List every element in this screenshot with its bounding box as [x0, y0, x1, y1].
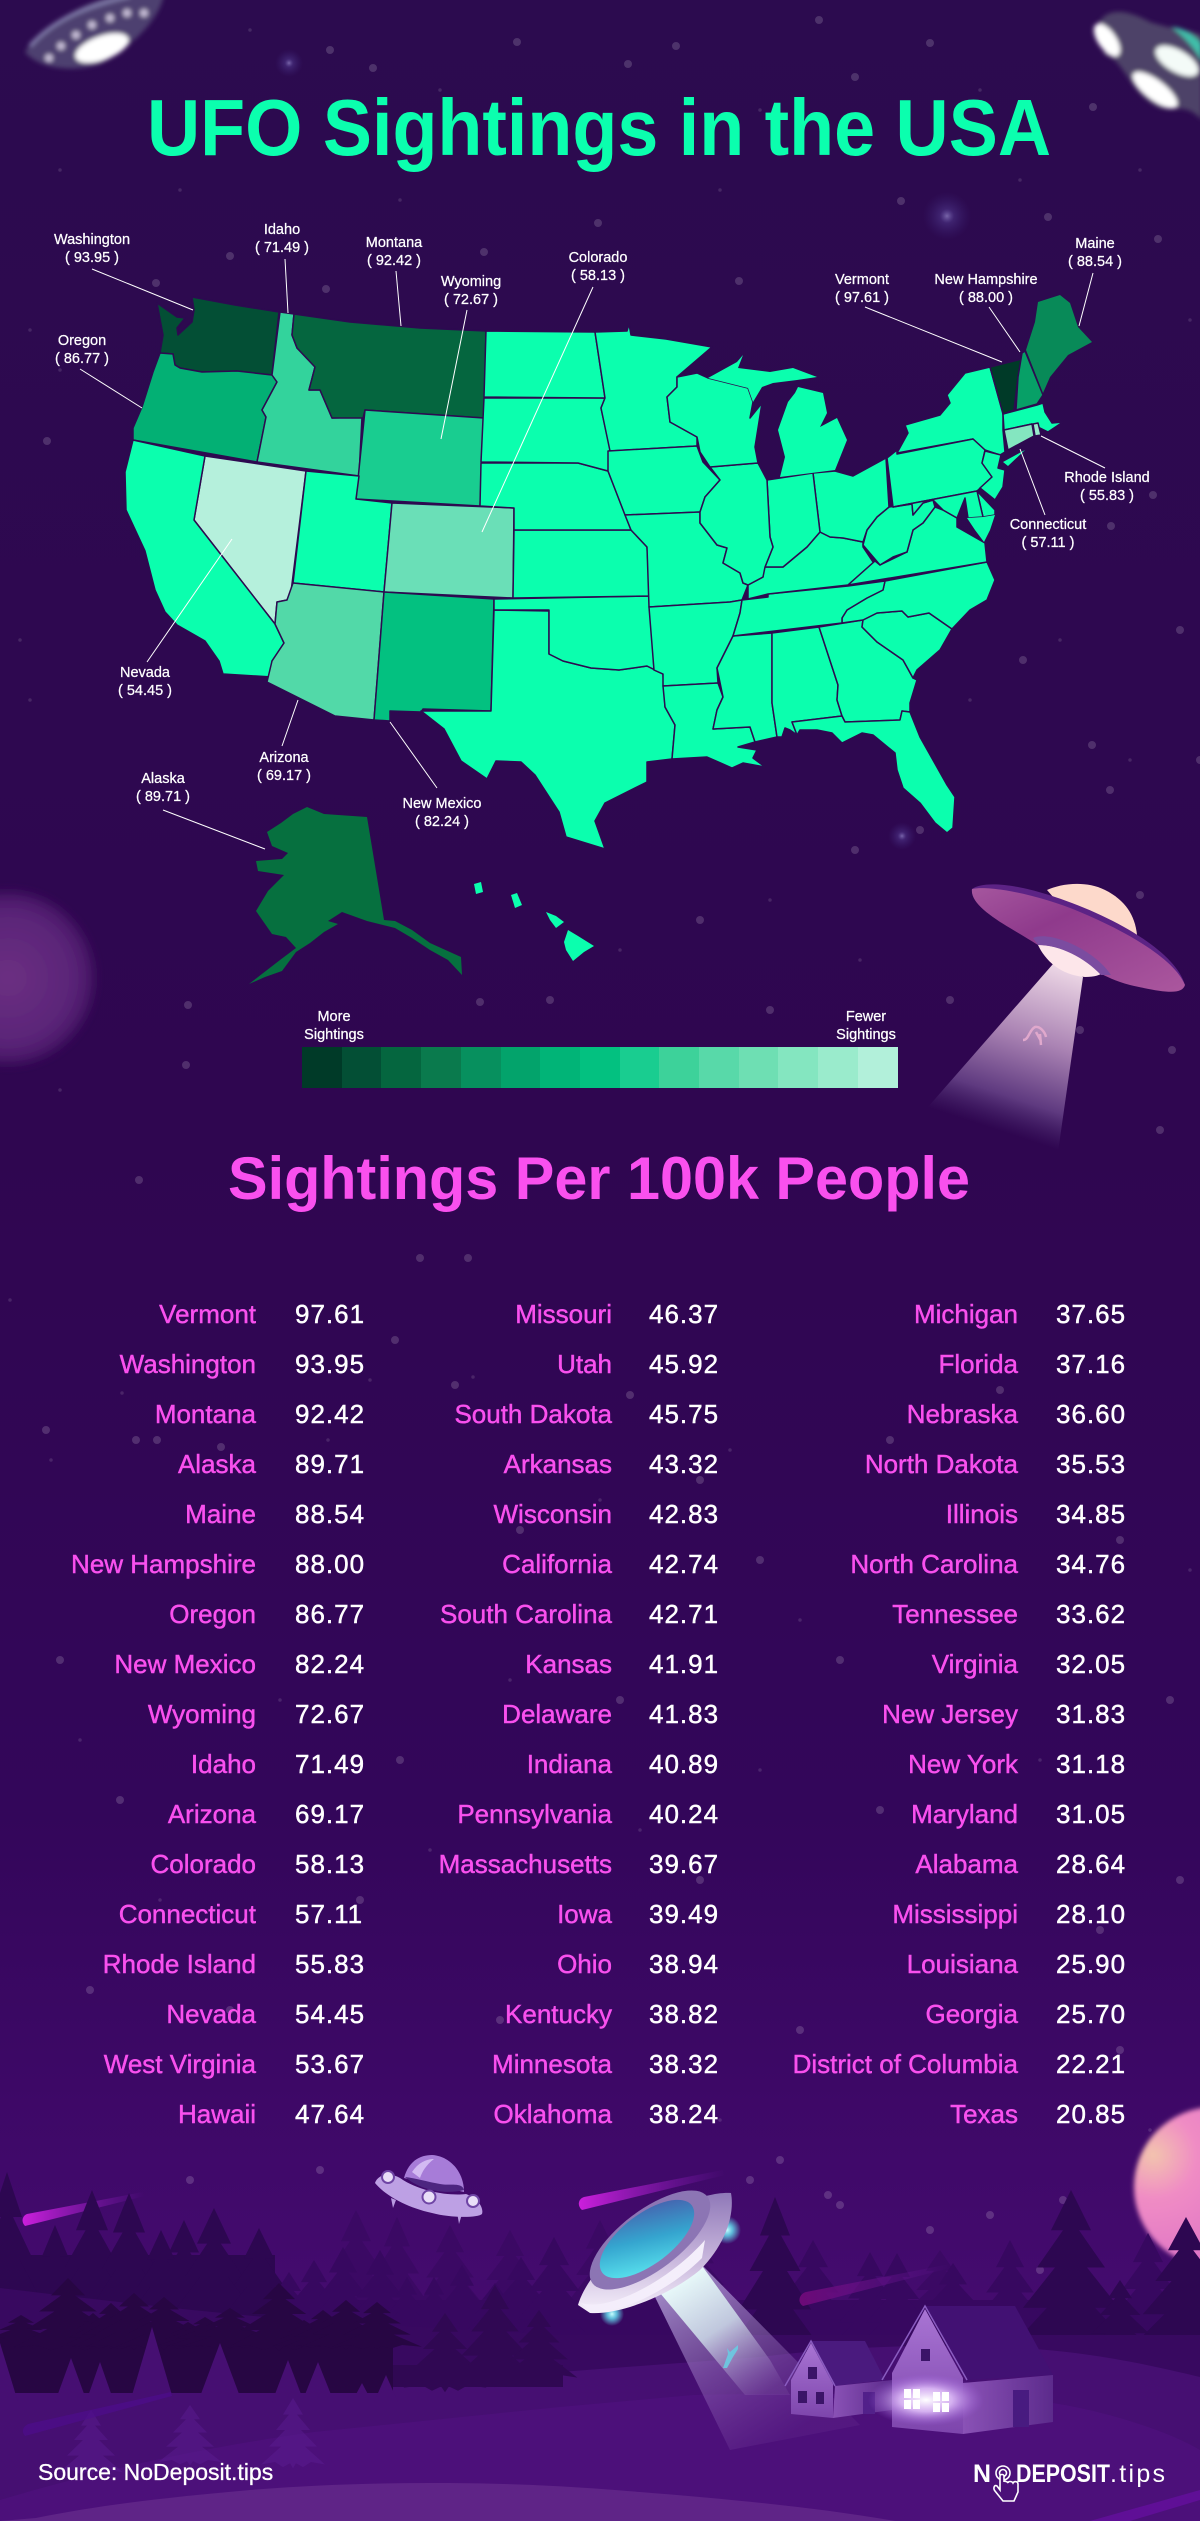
table column 3: 31.83 — [1056, 1699, 1126, 1729]
table column 2: South Dakota — [454, 1399, 613, 1429]
table column 2: Iowa — [557, 1899, 613, 1929]
table column 2: 45.75 — [649, 1399, 719, 1429]
lower dark treeline — [0, 2278, 422, 2393]
table column 1: West Virginia — [104, 2049, 257, 2079]
state: Oklahoma — [494, 596, 663, 674]
tractor beam — [928, 964, 1083, 1152]
state: Iowa — [608, 446, 720, 515]
label: Arizona: Arizona — [259, 750, 309, 766]
table column 1: 82.24 — [295, 1649, 365, 1679]
ufo: silver saucer — [574, 2173, 741, 2326]
table column 2: 41.83 — [649, 1699, 719, 1729]
label: Wyoming: ( 72.67 ) — [444, 292, 498, 308]
table column 2: Arkansas — [504, 1449, 612, 1479]
state: Indiana — [765, 473, 820, 567]
label: Maine: Maine — [1075, 236, 1115, 252]
table column 3: 25.90 — [1056, 1949, 1126, 1979]
label: Vermont: Vermont — [835, 272, 889, 288]
label: Nevada: ( 54.45 ) — [118, 683, 172, 699]
table column 1: Rhode Island — [103, 1949, 256, 1979]
state: Georgia — [819, 620, 917, 722]
state: Kansas — [513, 530, 650, 598]
table column 3: 31.18 — [1056, 1749, 1126, 1779]
table column 3: Georgia — [926, 1999, 1019, 2029]
state: Arkansas — [649, 600, 742, 686]
state: Minnesota — [595, 324, 712, 451]
table column 1: 88.00 — [295, 1549, 365, 1579]
label: Oregon: Oregon — [58, 333, 106, 349]
table column 2: 39.49 — [649, 1899, 719, 1929]
cyan dome — [587, 2185, 707, 2293]
table column 3: 22.21 — [1056, 2049, 1126, 2079]
bright comet behind trees — [23, 2192, 145, 2226]
ufo: small purple — [375, 2155, 482, 2224]
state: Ohio — [813, 458, 889, 542]
logo: NoDeposit.tips: DEPOSIT — [1016, 2460, 1110, 2488]
table column 1: 86.77 — [295, 1599, 365, 1629]
state: Kentucky — [748, 532, 875, 599]
state: California — [125, 440, 284, 677]
table column 1: 93.95 — [295, 1349, 365, 1379]
table column 3: 25.70 — [1056, 1999, 1126, 2029]
table column 1: 53.67 — [295, 2049, 365, 2079]
label: Alaska: ( 89.71 ) — [136, 789, 190, 805]
table column 3: 28.64 — [1056, 1849, 1126, 1879]
table column 3: North Dakota — [865, 1449, 1019, 1479]
table column 3: 35.53 — [1056, 1449, 1126, 1479]
state: North Carolina — [842, 562, 995, 629]
table column 2: 40.89 — [649, 1749, 719, 1779]
label: Vermont: ( 97.61 ) — [835, 290, 889, 306]
label: Wyoming: Wyoming — [441, 274, 501, 290]
table column 3 — [793, 1299, 1126, 2129]
state: Washington — [157, 297, 279, 375]
state: Maryland — [893, 491, 983, 518]
state: New Hampshire — [1016, 351, 1043, 410]
state: Pennsylvania — [887, 439, 992, 507]
state: Utah — [293, 471, 392, 592]
label: Maine: ( 88.54 ) — [1068, 254, 1122, 270]
state: Illinois — [700, 463, 773, 585]
label: Rhode Island: ( 55.83 ) — [1080, 488, 1134, 504]
dark ground band — [0, 2288, 1200, 2400]
table column 3: 37.16 — [1056, 1349, 1126, 1379]
table column 2: 46.37 — [649, 1299, 719, 1329]
saucer body — [972, 888, 1185, 992]
state: Maine — [1026, 295, 1092, 393]
icon: pointing hand — [994, 2466, 1018, 2501]
table column 3: Louisiana — [907, 1949, 1019, 1979]
table column 2: 38.32 — [649, 2049, 719, 2079]
legend label: fewer sightings: Sightings — [836, 1027, 896, 1043]
table column 1: Colorado — [150, 1849, 256, 1879]
state: Florida — [792, 711, 955, 833]
table column 1: Idaho — [191, 1749, 256, 1779]
glow spots — [275, 49, 971, 850]
table column 2: 42.71 — [649, 1599, 719, 1629]
table column 1: Wyoming — [148, 1699, 256, 1729]
state: Alabama — [772, 627, 842, 737]
upper dome — [1047, 884, 1137, 935]
state: New Jersey — [980, 451, 1005, 500]
table column 3: 34.76 — [1056, 1549, 1126, 1579]
table column 1: 72.67 — [295, 1699, 365, 1729]
source: Source: NoDeposit.tips — [38, 2459, 273, 2485]
logo: NoDeposit.tips: N — [973, 2460, 991, 2488]
table column 2: 43.32 — [649, 1449, 719, 1479]
big house — [868, 2306, 1053, 2434]
state: Delmarva peninsula — [967, 515, 995, 542]
table column 1: 97.61 — [295, 1299, 365, 1329]
state: West Virginia — [863, 500, 935, 565]
state: Connecticut — [1004, 424, 1034, 450]
gaps between foreground trees — [0, 2327, 398, 2402]
table column 1: 54.45 — [295, 1999, 365, 2029]
state: New York — [897, 367, 1005, 455]
dark upper left forest — [0, 2172, 307, 2362]
state: Long Island — [1003, 450, 1025, 466]
state: South Dakota — [481, 398, 610, 471]
state: Michigan — [708, 355, 847, 477]
table column 2: 38.24 — [649, 2099, 719, 2129]
table column 1: New Mexico — [114, 1649, 256, 1679]
state: Massachusetts — [1003, 403, 1063, 432]
legend label: more sightings: More — [317, 1009, 351, 1025]
label: Colorado: ( 58.13 ) — [571, 268, 625, 284]
table column 1 — [71, 1299, 365, 2129]
table column 3: Texas — [950, 2099, 1018, 2129]
label: New Mexico: New Mexico — [403, 796, 481, 812]
far pale treeline — [308, 2210, 985, 2342]
planet: left purple — [0, 892, 94, 1064]
state: Vermont — [990, 359, 1022, 414]
label: Montana: ( 92.42 ) — [367, 253, 421, 269]
logo: NoDeposit.tips: .tips — [1110, 2460, 1165, 2488]
state: Missouri — [625, 512, 748, 607]
table column 3: 36.60 — [1056, 1399, 1126, 1429]
table column 2: Wisconsin — [494, 1499, 612, 1529]
logo: NoDeposit.tips — [973, 2460, 1165, 2501]
table column 2: California — [502, 1549, 613, 1579]
table column 1: Washington — [120, 1349, 256, 1379]
state: Alaska — [249, 807, 462, 984]
state: North Dakota — [484, 331, 605, 398]
label: New Hampshire: New Hampshire — [934, 272, 1038, 288]
state: Mississippi — [713, 633, 777, 742]
table column 2: Utah — [557, 1349, 612, 1379]
state: New Mexico — [374, 592, 494, 721]
houses — [785, 2306, 1053, 2434]
table column 1: Arizona — [168, 1799, 257, 1829]
front hill — [0, 2483, 895, 2521]
state: South Carolina — [862, 611, 952, 678]
label: Connecticut: Connecticut — [1010, 517, 1086, 533]
table column 3: Nebraska — [907, 1399, 1019, 1429]
table column 2 — [439, 1299, 719, 2129]
ufo: purple saucer with beam — [928, 884, 1185, 1152]
state: Wyoming — [356, 410, 484, 506]
label: Washington: Washington — [54, 232, 130, 248]
table column 3: 28.10 — [1056, 1899, 1126, 1929]
ufo: top right blurred — [1089, 12, 1200, 120]
pale foreground trees — [59, 2398, 325, 2476]
small house — [785, 2341, 892, 2418]
state: Colorado — [384, 503, 514, 598]
table column 2: 38.82 — [649, 1999, 719, 2029]
comets — [23, 2170, 1200, 2521]
subtitle: Sightings Per 100k People — [228, 1145, 970, 1212]
table column 2: South Carolina — [440, 1599, 613, 1629]
leader lines — [80, 259, 1105, 849]
table column 2: Delaware — [502, 1699, 612, 1729]
table column 3: Michigan — [914, 1299, 1018, 1329]
state: Nevada — [194, 456, 306, 624]
label: Washington: ( 93.95 ) — [65, 250, 119, 266]
planet: right pink — [1134, 2107, 1200, 2267]
lower second treeline — [393, 2285, 577, 2392]
table column 1: 57.11 — [295, 1899, 363, 1929]
table column 3: Virginia — [932, 1649, 1019, 1679]
table column 2: Pennsylvania — [457, 1799, 613, 1829]
table column 3: Florida — [939, 1349, 1019, 1379]
table column 1: Nevada — [166, 1999, 257, 2029]
table column 3: Mississippi — [892, 1899, 1018, 1929]
lower window ring — [1033, 936, 1111, 975]
label: Nevada: Nevada — [120, 665, 170, 681]
table column 2: 39.67 — [649, 1849, 719, 1879]
table column 1: Maine — [185, 1499, 256, 1529]
table column 3: North Carolina — [850, 1549, 1019, 1579]
state: Idaho — [257, 312, 362, 476]
table column 2: Kansas — [525, 1649, 612, 1679]
label: Idaho: ( 71.49 ) — [255, 240, 309, 256]
table column 1: 89.71 — [295, 1449, 365, 1479]
table column 2: 45.92 — [649, 1349, 719, 1379]
table column 3: Maryland — [911, 1799, 1018, 1829]
state: Louisiana — [663, 683, 765, 768]
table column 2: Kentucky — [505, 1999, 612, 2029]
table column 2: Oklahoma — [494, 2099, 613, 2129]
table column 1: New Hampshire — [71, 1549, 256, 1579]
mid forest — [251, 2233, 1200, 2360]
legend — [302, 1009, 898, 1088]
label: Alaska: Alaska — [141, 771, 185, 787]
table column 1: 92.42 — [295, 1399, 365, 1429]
table column 1: Oregon — [169, 1599, 256, 1629]
table column 2: Indiana — [527, 1749, 613, 1779]
table column 1: 55.83 — [295, 1949, 365, 1979]
label: Idaho: Idaho — [264, 222, 300, 238]
table column 1: Montana — [155, 1399, 257, 1429]
abductee — [723, 2345, 738, 2368]
ufo: top left blurred — [25, 0, 164, 69]
label: Arizona: ( 69.17 ) — [257, 768, 311, 784]
label: New Mexico: ( 82.24 ) — [415, 814, 469, 830]
table column 1: 71.49 — [295, 1749, 365, 1779]
table column 2: Massachusetts — [439, 1849, 612, 1879]
table column 1: 47.64 — [295, 2099, 365, 2129]
middle hill — [0, 2394, 1200, 2521]
table column 2: Ohio — [557, 1949, 612, 1979]
table column 2: 40.24 — [649, 1799, 719, 1829]
tall dark trees on the right — [727, 2190, 1200, 2360]
label: New Hampshire: ( 88.00 ) — [959, 290, 1013, 306]
table column 3: 33.62 — [1056, 1599, 1126, 1629]
abductee silhouette — [1023, 1027, 1046, 1045]
ufo light beam — [655, 2263, 860, 2450]
label: Montana: Montana — [366, 235, 422, 251]
table column 3: 20.85 — [1056, 2099, 1126, 2129]
label: Oregon: ( 86.77 ) — [55, 351, 109, 367]
table column 2: Minnesota — [492, 2049, 613, 2079]
table column 2: Missouri — [515, 1299, 612, 1329]
title: UFO Sightings in the USA — [147, 83, 1051, 172]
table column 3: 32.05 — [1056, 1649, 1126, 1679]
table column 1: Vermont — [159, 1299, 257, 1329]
table column 1: Connecticut — [119, 1899, 257, 1929]
table column 1: Alaska — [178, 1449, 257, 1479]
table column 2: 42.74 — [649, 1549, 719, 1579]
state: Arizona — [267, 583, 384, 720]
lit windows — [868, 2374, 984, 2426]
table column 3: Alabama — [915, 1849, 1019, 1879]
map of the USA — [125, 295, 1092, 984]
state: Delaware — [977, 491, 995, 517]
state: Hawaii — [474, 882, 594, 961]
table column 1: Hawaii — [178, 2099, 256, 2129]
table column 3: New Jersey — [882, 1699, 1018, 1729]
table column 3: 31.05 — [1056, 1799, 1126, 1829]
label: Rhode Island: Rhode Island — [1064, 470, 1150, 486]
night landscape — [0, 2172, 1200, 2521]
table column 3: New York — [908, 1749, 1019, 1779]
state: Rhode Island — [1033, 423, 1041, 436]
table column 3: Illinois — [946, 1499, 1018, 1529]
state: Oregon — [133, 353, 277, 462]
state: Virginia — [848, 507, 987, 585]
table column 3: District of Columbia — [793, 2049, 1019, 2079]
map labels — [54, 222, 1150, 830]
lower dome — [1038, 945, 1102, 977]
table column 1: 58.13 — [295, 1849, 365, 1879]
table column 2: 42.83 — [649, 1499, 719, 1529]
state: Montana — [292, 314, 486, 418]
state: Nebraska — [480, 463, 631, 530]
legend colour scale — [302, 1047, 898, 1088]
table column 2: 41.91 — [649, 1649, 719, 1679]
state: Tennessee — [733, 581, 885, 636]
label: Colorado: Colorado — [569, 250, 627, 266]
table column 3: 34.85 — [1056, 1499, 1126, 1529]
table column 1: 69.17 — [295, 1799, 365, 1829]
label: Connecticut: ( 57.11 ) — [1022, 535, 1074, 551]
hill behind houses — [0, 2346, 1200, 2521]
table column 3: 37.65 — [1056, 1299, 1126, 1329]
table column 1: 88.54 — [295, 1499, 365, 1529]
table column 3: Tennessee — [892, 1599, 1018, 1629]
state: Texas — [421, 610, 675, 849]
state: Wisconsin — [667, 373, 762, 467]
legend label: fewer sightings: Fewer — [846, 1009, 886, 1025]
saucer rim — [972, 884, 1185, 985]
table column 2: 38.94 — [649, 1949, 719, 1979]
legend label: more sightings: Sightings — [304, 1027, 364, 1043]
